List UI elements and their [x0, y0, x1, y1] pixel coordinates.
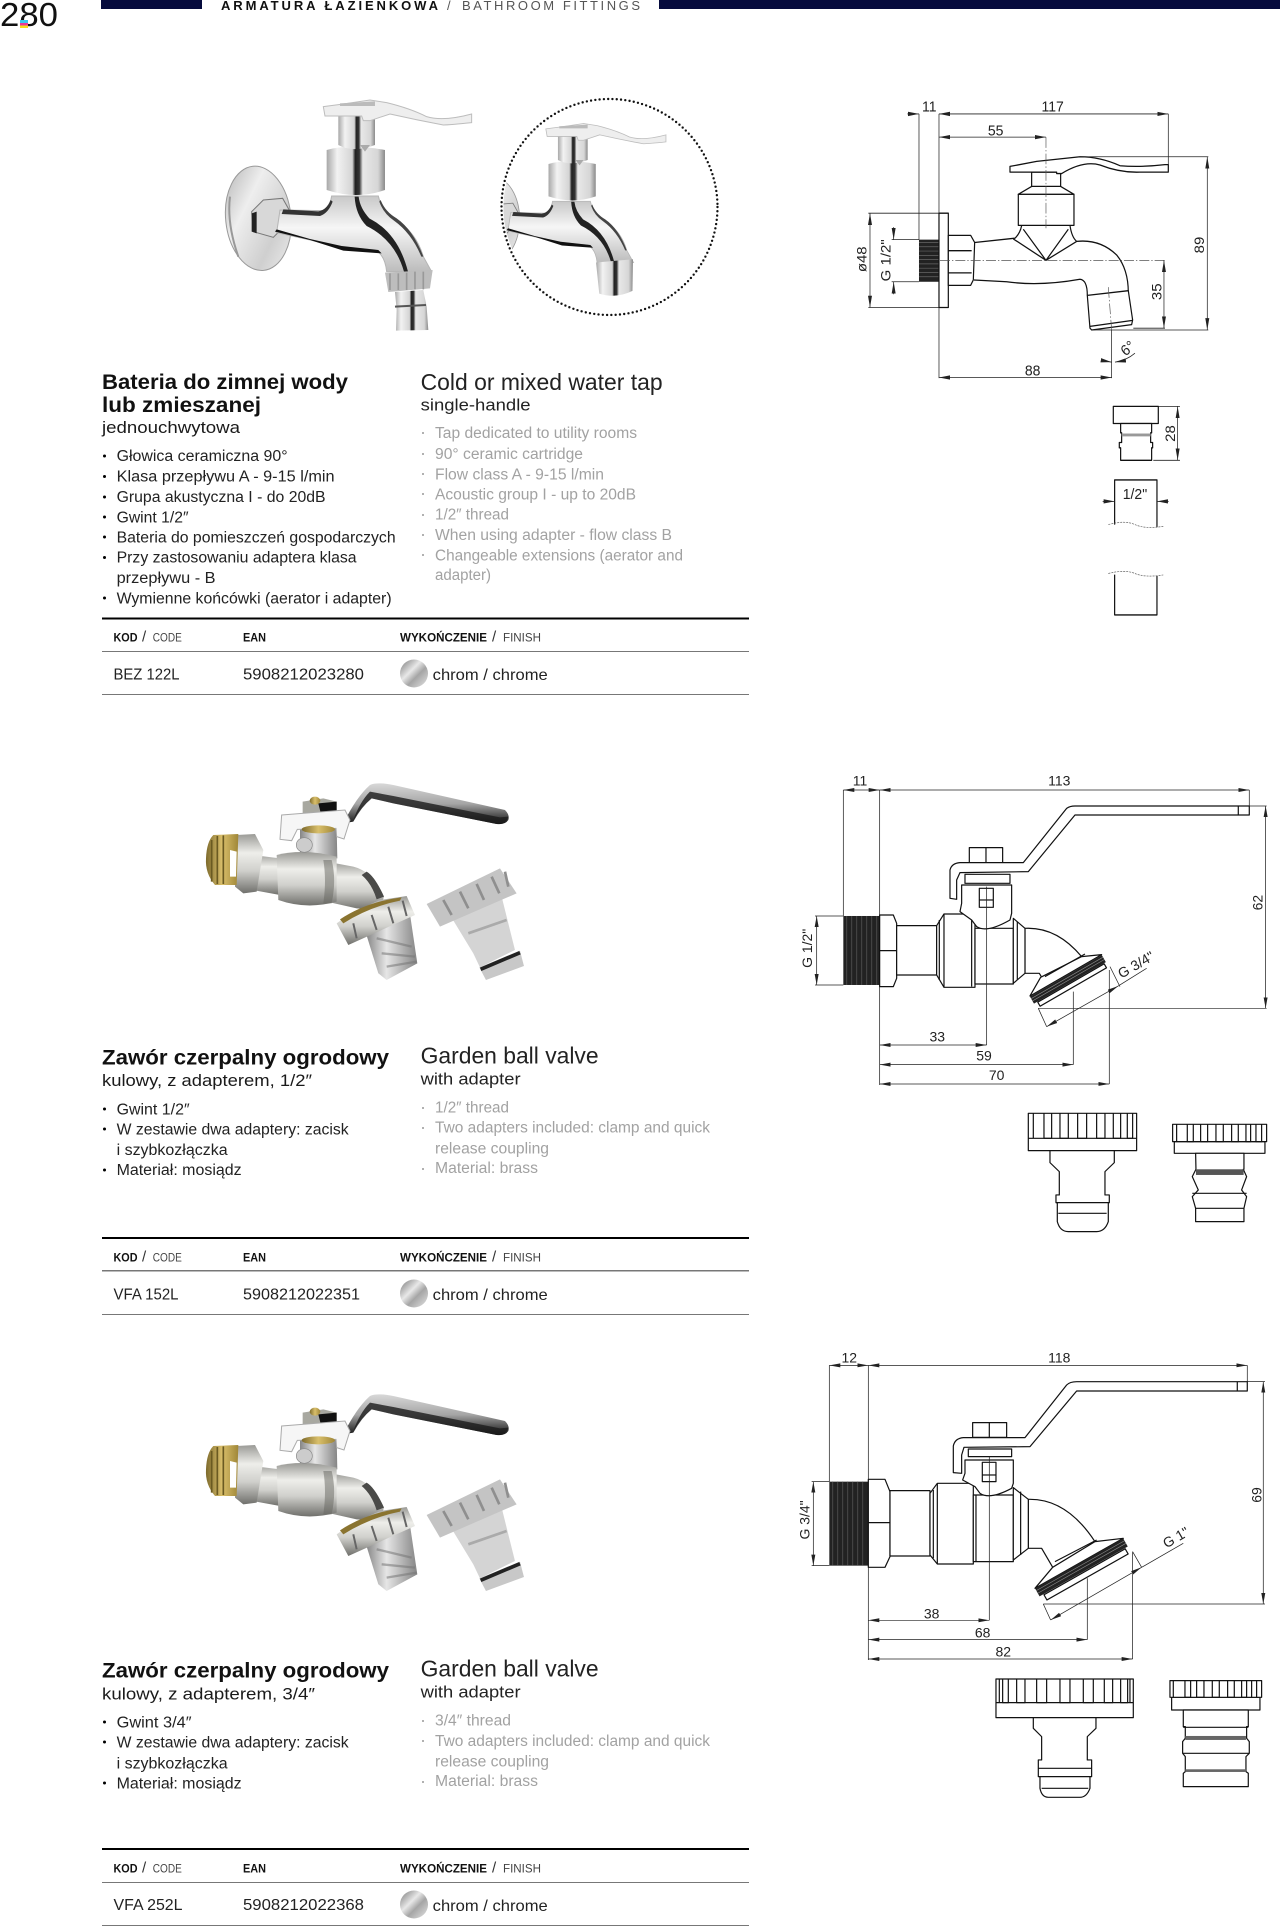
feature list: English: Two adapters included: clamp and quick — [435, 1733, 710, 1750]
product table: KOD — [114, 1253, 138, 1265]
product table: VFA 152L — [114, 1286, 179, 1303]
heading: English title — [420, 1042, 599, 1088]
heading: English title — [421, 369, 663, 415]
technical drawing: valve 3/4 dimensions — [796, 1350, 1265, 1797]
heading: Polish title — [101, 371, 348, 437]
feature list: English: 3/4″ thread — [435, 1713, 511, 1730]
feature list: Polish — [103, 448, 396, 607]
photo: garden ball valve 1/2 with adapters — [206, 783, 524, 980]
technical drawing: tap dimensions: ø48 — [855, 246, 871, 272]
product table: chrom / chrome — [433, 667, 548, 684]
feature list: English: Two adapters included: clamp and quick — [435, 1120, 710, 1137]
clamp adapter — [1028, 1113, 1137, 1232]
technical drawing: valve 3/4 dimensions: 38 — [924, 1605, 940, 1621]
product table: / — [492, 1860, 497, 1877]
feature list: Polish: Grupa akustyczna I - do 20dB — [117, 489, 326, 506]
product table: CODE — [153, 633, 182, 645]
technical drawing: tap dimensions: 35 — [1150, 283, 1165, 300]
product table: FINISH — [503, 633, 541, 645]
product table: WYKOŃCZENIE — [400, 1252, 487, 1265]
technical drawing: tap dimensions: G 1/2" — [879, 239, 895, 281]
product table: / — [142, 629, 147, 646]
quick coupling adapter — [1170, 1681, 1262, 1787]
heading: Polish title: kulowy, z adapterem, 1/2″ — [102, 1072, 312, 1090]
product table: 5908212023280 — [243, 666, 364, 683]
heading: Polish title — [102, 1046, 389, 1090]
feature list: English: Changeable extensions (aerator and — [435, 547, 683, 564]
feature list: English: adapter) — [435, 567, 491, 584]
technical drawing: valve 3/4 dimensions: 82 — [996, 1644, 1011, 1660]
feature list: English — [422, 1099, 710, 1177]
technical drawing: valve 1/2 dimensions: 113 — [1048, 772, 1071, 788]
technical drawing: tap dimensions — [855, 99, 1208, 615]
product table: WYKOŃCZENIE — [400, 1863, 487, 1876]
photo: wall tap with adapter — [220, 100, 472, 331]
feature list: English: Tap dedicated to utility rooms — [435, 425, 637, 442]
feature list: English: Acoustic group I - up to 20dB — [435, 486, 636, 503]
feature list: English: When using adapter - flow class B — [435, 527, 672, 544]
technical drawing: valve 1/2 dimensions — [799, 772, 1267, 1232]
feature list: Polish: Bateria do pomieszczeń gospodarczych — [117, 529, 396, 546]
clamp adapter — [996, 1679, 1133, 1797]
product table: chrom / chrome — [433, 1898, 548, 1915]
heading: English title — [420, 1656, 599, 1702]
heading: English title: Cold or mixed water tap — [421, 369, 663, 395]
feature list: English: Material: brass — [435, 1773, 538, 1790]
technical drawing: valve 1/2 dimensions: 70 — [989, 1067, 1005, 1083]
heading: Polish title: jednouchwytowa — [101, 419, 241, 437]
product table: / — [142, 1860, 147, 1877]
feature list: Polish: W zestawie dwa adaptery: zacisk — [117, 1121, 349, 1138]
product table: / — [142, 1249, 147, 1266]
technical drawing: valve 3/4 dimensions: G 1" — [1160, 1523, 1192, 1551]
product table: CODE — [153, 1253, 182, 1265]
panel: product 1 — [101, 99, 1208, 695]
feature list: English: release coupling — [435, 1140, 549, 1157]
product table — [102, 618, 749, 695]
product table: FINISH — [503, 1253, 541, 1265]
photo: garden ball valve 3/4 with adapters — [206, 1394, 524, 1591]
technical drawing: valve 3/4 dimensions: 68 — [975, 1624, 991, 1640]
technical drawing: valve 3/4 dimensions: 12 — [842, 1350, 857, 1366]
product table: BEZ 122L — [114, 666, 180, 683]
technical drawing: valve 1/2 dimensions: G 1/2" — [799, 929, 815, 968]
heading: Polish title: Bateria do zimnej wody — [102, 371, 348, 394]
feature list: Polish: W zestawie dwa adaptery: zacisk — [117, 1734, 349, 1751]
technical drawing: valve 1/2 dimensions: 62 — [1249, 895, 1265, 910]
panel: product 3 — [102, 1350, 1265, 1926]
feature list: Polish: Materiał: mosiądz — [117, 1775, 242, 1792]
product table: EAN — [243, 633, 266, 645]
technical drawing: valve 3/4 dimensions: 69 — [1249, 1487, 1265, 1503]
feature list: English: release coupling — [435, 1754, 549, 1771]
heading: English title: single-handle — [421, 396, 531, 415]
product table: 5908212022351 — [243, 1286, 360, 1303]
product table: KOD — [114, 1864, 138, 1876]
header band left bar — [101, 0, 202, 9]
product table: 5908212022368 — [243, 1897, 364, 1914]
panel: product 2 — [102, 772, 1267, 1315]
feature list: English: 90° ceramic cartridge — [435, 446, 583, 463]
feature list: Polish: Materiał: mosiądz — [117, 1162, 242, 1179]
technical drawing: tap dimensions: 11 — [922, 99, 937, 116]
feature list: Polish: Wymienne końcówki (aerator i adapter) — [117, 590, 392, 607]
technical drawing: valve 1/2 dimensions: G 3/4" — [1115, 948, 1157, 981]
feature list: Polish: Gwint 1/2″ — [117, 509, 189, 526]
feature list: Polish: Gwint 3/4″ — [117, 1714, 192, 1731]
feature list: Polish: Głowica ceramiczna 90° — [117, 448, 288, 465]
feature list: English — [422, 1713, 710, 1790]
adapter with 28 dimension: 28 — [1163, 425, 1179, 442]
feature list: Polish: Przy zastosowaniu adaptera klasa — [117, 550, 357, 567]
product table: WYKOŃCZENIE — [400, 632, 487, 645]
technical drawing: valve 1/2 dimensions: 11 — [853, 772, 867, 788]
product table: FINISH — [503, 1864, 541, 1876]
feature list: English — [422, 425, 683, 584]
product table: EAN — [243, 1864, 266, 1876]
feature list: Polish — [103, 1714, 349, 1792]
product table: / — [492, 1249, 497, 1266]
photo: detail circle with aerator — [500, 98, 719, 316]
feature list: Polish: i szybkozłączka — [117, 1142, 228, 1159]
pipe 1/2 inch section: 1/2" — [1123, 486, 1147, 503]
product table — [102, 1848, 749, 1926]
heading: Polish title: lub zmieszanej — [102, 394, 261, 417]
header band right bar — [659, 0, 1280, 9]
feature list: English: Material: brass — [435, 1160, 538, 1177]
product table: VFA 252L — [114, 1897, 183, 1914]
product table: CODE — [153, 1864, 182, 1876]
technical drawing: valve 3/4 dimensions: 118 — [1048, 1350, 1071, 1366]
technical drawing: valve 1/2 dimensions: 59 — [976, 1048, 992, 1064]
heading: Polish title: kulowy, z adapterem, 3/4″ — [102, 1685, 315, 1703]
feature list: Polish: Klasa przepływu A - 9-15 l/min — [117, 469, 335, 486]
product table: KOD — [114, 633, 138, 645]
heading: English title: with adapter — [420, 1069, 521, 1088]
feature list: Polish: i szybkozłączka — [117, 1755, 228, 1772]
technical drawing: valve 3/4 dimensions: G 3/4" — [796, 1500, 812, 1540]
heading: Polish title: Zawór czerpalny ogrodowy — [102, 1660, 389, 1683]
technical drawing: valve 1/2 dimensions: 33 — [930, 1029, 945, 1045]
technical drawing: tap dimensions: 55 — [988, 123, 1003, 139]
feature list: Polish: przepływu - B — [117, 570, 216, 587]
heading: English title: Garden ball valve — [421, 1042, 599, 1068]
technical drawing: tap dimensions: 89 — [1192, 237, 1208, 253]
header title — [221, 0, 640, 13]
technical drawing: tap dimensions: 6° — [1118, 338, 1138, 360]
technical drawing: tap dimensions: 88 — [1025, 363, 1040, 380]
feature list: English: Flow class A - 9-15 l/min — [435, 466, 604, 483]
product table — [102, 1237, 749, 1315]
heading: English title: Garden ball valve — [421, 1656, 599, 1682]
technical drawing: tap dimensions: 117 — [1041, 99, 1064, 116]
feature list: Polish — [103, 1101, 349, 1179]
feature list: English: 1/2″ thread — [435, 1099, 509, 1116]
heading: Polish title: Zawór czerpalny ogrodowy — [102, 1046, 389, 1069]
heading: Polish title — [102, 1660, 389, 1703]
product table: EAN — [243, 1253, 266, 1265]
heading: English title: with adapter — [420, 1683, 521, 1702]
product table: chrom / chrome — [433, 1287, 548, 1304]
quick coupling adapter — [1173, 1124, 1267, 1222]
product table: / — [492, 629, 497, 646]
adapter with 28 dimension — [1113, 406, 1180, 460]
feature list: English: 1/2″ thread — [435, 507, 509, 524]
feature list: Polish: Gwint 1/2″ — [117, 1101, 190, 1118]
pipe 1/2 inch section — [1103, 480, 1169, 615]
